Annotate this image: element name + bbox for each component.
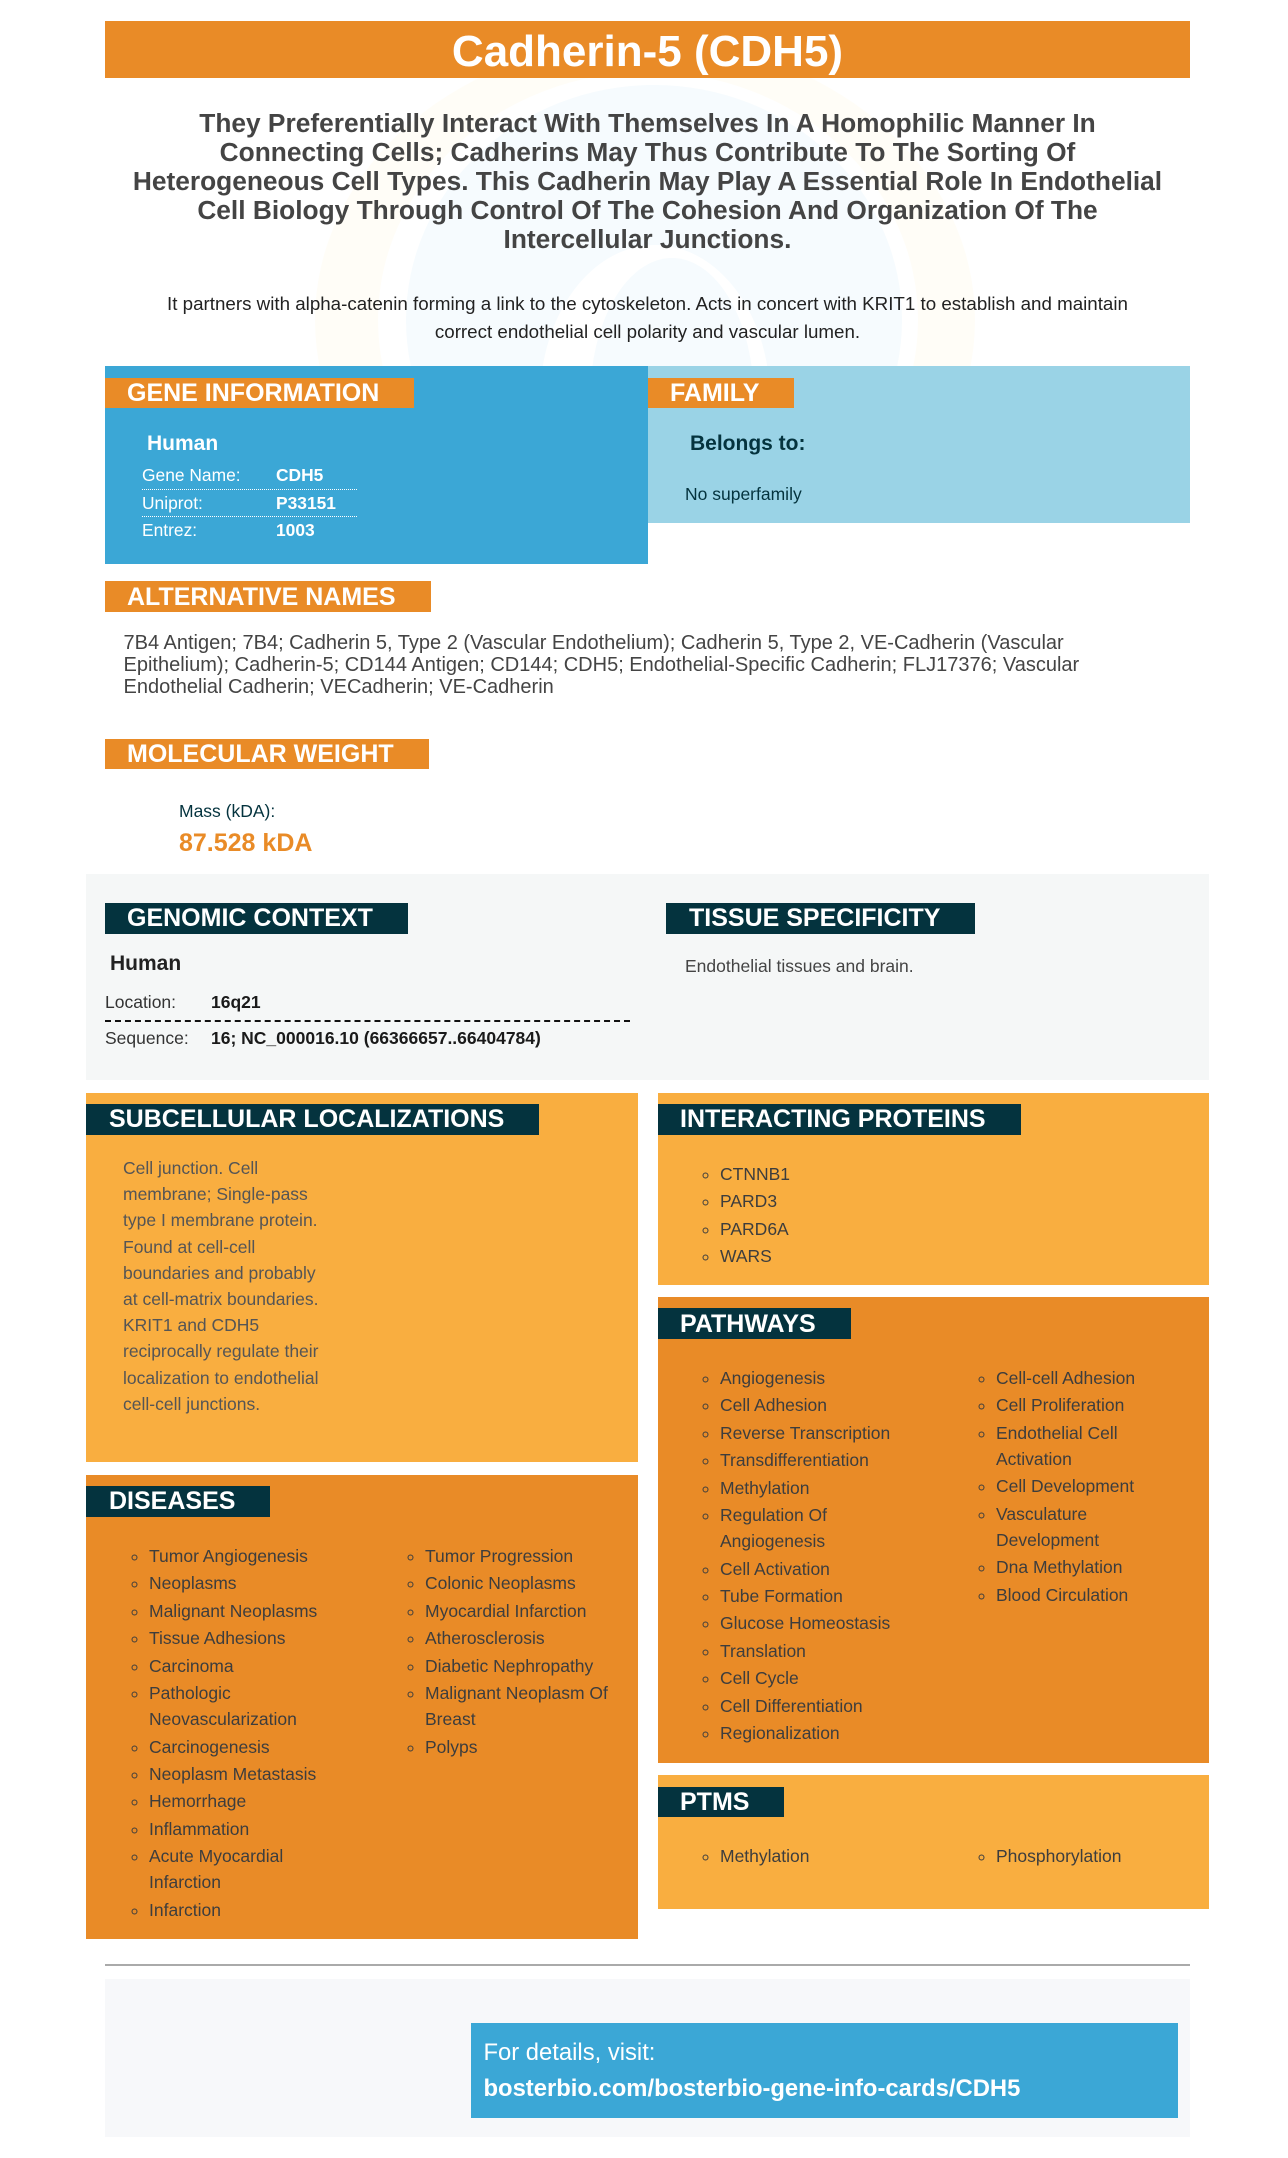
list: pathways column 2: Cell Proliferation	[996, 1395, 1124, 1415]
callout: details link	[471, 2023, 1178, 2118]
heading: family	[648, 378, 794, 408]
panel: genomic context and tissue specificity: 16q21	[211, 992, 261, 1012]
panel: footer	[105, 1979, 1190, 2137]
row: entrez	[142, 520, 315, 540]
list: diseases column 2	[408, 1546, 608, 1757]
list: diseases column 1: Infarction	[149, 1872, 221, 1892]
list: pathways column 2: Vasculature	[996, 1504, 1087, 1524]
alternative names text: 7B4 Antigen; 7B4; Cadherin 5, Type 2 (Vascular Endothelium); Cadherin 5, Type 2, VE-Cadherin (Vascular	[124, 632, 1064, 654]
heading summary: Connecting Cells; Cadherins May Thus Contribute To The Sorting Of	[220, 137, 1075, 167]
title	[105, 21, 1190, 78]
list: pathways column 1: Reverse Transcription	[720, 1423, 890, 1443]
list: diseases column 2: Malignant Neoplasm Of	[425, 1683, 608, 1703]
list: diseases column 2: Diabetic Nephropathy	[425, 1656, 593, 1676]
localization text: reciprocally regulate their	[123, 1341, 319, 1361]
row: gene name: CDH5	[276, 465, 323, 485]
alternative names text	[124, 632, 1079, 698]
list: pathways column 2: Blood Circulation	[996, 1585, 1128, 1605]
list: proteins	[702, 1164, 790, 1266]
heading summary	[133, 108, 1162, 254]
list: proteins: PARD3	[720, 1191, 777, 1211]
list: pathways column 2: Dna Methylation	[996, 1557, 1122, 1577]
alternative names text: Endothelial Cadherin; VECadherin; VE-Cadherin	[124, 676, 554, 698]
list: diseases column 1: Acute Myocardial	[149, 1846, 283, 1866]
list: diseases column 2: Atherosclerosis	[425, 1628, 545, 1648]
mass label: Mass (kDA):	[179, 801, 275, 821]
row: entrez: 1003	[276, 520, 315, 540]
heading: molecular weight: MOLECULAR WEIGHT	[127, 740, 394, 768]
localization text: cell-cell junctions.	[123, 1394, 260, 1414]
list: pathways column 1: Tube Formation	[720, 1586, 843, 1606]
list: pathways column 1: Regionalization	[720, 1723, 840, 1743]
panel: diseases	[86, 1475, 638, 1939]
list: pathways column 1: Cell Cycle	[720, 1668, 799, 1688]
callout: details link: For details, visit:	[484, 2039, 655, 2066]
description text: correct endothelial cell polarity and vascular lumen.	[435, 320, 860, 342]
list: proteins: WARS	[720, 1246, 772, 1266]
organism label: Human	[110, 952, 181, 975]
row: uniprot	[142, 490, 357, 517]
row: sequence: Sequence:	[105, 1028, 189, 1048]
list: diseases column 2: Tumor Progression	[425, 1546, 573, 1566]
list: diseases column 1: Hemorrhage	[149, 1791, 246, 1811]
heading: pathways: PATHWAYS	[680, 1310, 816, 1338]
list: diseases column 2: Polyps	[425, 1737, 478, 1757]
list: pathways column 1: Angiogenesis	[720, 1368, 825, 1388]
tissue text: Endothelial tissues and brain.	[685, 956, 914, 976]
list: ptms column 2: Phosphorylation	[996, 1846, 1122, 1866]
localization text: localization to endothelial	[123, 1368, 319, 1388]
heading: gene information: GENE INFORMATION	[127, 379, 379, 407]
alternative names text: Epithelium); Cadherin-5; CD144 Antigen; CD144; CDH5; Endothelial-Specific Cadherin; FLJ17376; Vascular	[124, 654, 1079, 676]
heading: pathways	[658, 1308, 851, 1339]
heading: subcellular localizations: SUBCELLULAR LOCALIZATIONS	[109, 1105, 504, 1133]
row: uniprot: Uniprot:	[142, 493, 203, 513]
list: pathways column 1: Angiogenesis	[720, 1531, 825, 1551]
panel: interacting proteins	[658, 1093, 1209, 1285]
heading: diseases: DISEASES	[109, 1487, 235, 1515]
heading: ptms: PTMS	[680, 1788, 749, 1816]
heading: alternative names: ALTERNATIVE NAMES	[127, 583, 396, 611]
list: diseases column 1: Carcinogenesis	[149, 1737, 270, 1757]
callout: details link: bosterbio.com/bosterbio-gene-info-cards/CDH5	[484, 2075, 1020, 2102]
heading summary: Heterogeneous Cell Types. This Cadherin May Play A Essential Role In Endothelial	[133, 166, 1162, 196]
heading: genomic context: GENOMIC CONTEXT	[127, 904, 373, 932]
organism label: Human	[147, 432, 218, 455]
heading summary: Cell Biology Through Control Of The Cohesion And Organization Of The	[197, 195, 1098, 225]
heading: family: FAMILY	[670, 379, 759, 407]
mass value: 87.528 kDA	[179, 829, 312, 857]
list: pathways column 2: Cell Development	[996, 1476, 1134, 1496]
row: gene name	[142, 462, 357, 490]
list: diseases column 2: Colonic Neoplasms	[425, 1573, 576, 1593]
list: pathways column 1: Cell Differentiation	[720, 1696, 863, 1716]
list: diseases column 1: Infarction	[149, 1900, 221, 1920]
heading: ptms	[658, 1787, 784, 1817]
panel: subcellular localizations	[86, 1093, 638, 1462]
heading summary: They Preferentially Interact With Themselves In A Homophilic Manner In	[199, 108, 1096, 138]
list: pathways column 1: Regulation Of	[720, 1505, 827, 1525]
list: diseases column 1: Tumor Angiogenesis	[149, 1546, 308, 1566]
row: location: Location:	[105, 992, 176, 1012]
list: pathways column 2: Activation	[996, 1449, 1072, 1469]
list: diseases column 1: Tissue Adhesions	[149, 1628, 286, 1648]
panel: ptms	[658, 1775, 1209, 1909]
list: pathways column 1: Transdifferentiation	[720, 1450, 869, 1470]
row: location	[105, 992, 261, 1012]
list: diseases column 1: Pathologic	[149, 1683, 231, 1703]
family label: Belongs to:	[690, 432, 806, 455]
localization text: at cell-matrix boundaries.	[123, 1289, 318, 1309]
localization text: Found at cell-cell	[123, 1237, 255, 1257]
family value: No superfamily	[685, 484, 802, 504]
list: pathways column 1: Translation	[720, 1641, 806, 1661]
list: pathways column 1	[702, 1368, 890, 1743]
list: diseases column 1: Malignant Neoplasms	[149, 1601, 317, 1621]
row: uniprot: P33151	[276, 493, 336, 513]
panel: family	[648, 366, 1190, 523]
list: diseases column 1: Neovascularization	[149, 1709, 297, 1729]
list: pathways column 1: Methylation	[720, 1478, 810, 1498]
localization text	[123, 1158, 319, 1414]
localization text: Cell junction. Cell	[123, 1158, 258, 1178]
background watermark	[406, 85, 902, 366]
dashed rule	[105, 1020, 630, 1022]
list: pathways column 1: Cell Activation	[720, 1559, 830, 1579]
heading: interacting proteins: INTERACTING PROTEINS	[680, 1105, 986, 1133]
panel: genomic context and tissue specificity: 16; NC_000016.10 (66366657..66404784)	[211, 1028, 541, 1048]
heading summary: Intercellular Junctions.	[504, 224, 791, 254]
list: pathways column 1: Cell Adhesion	[720, 1395, 827, 1415]
row: entrez: Entrez:	[142, 520, 197, 540]
list: pathways column 2	[978, 1368, 1135, 1605]
list: pathways column 1: Glucose Homeostasis	[720, 1613, 890, 1633]
list: pathways column 2: Development	[996, 1530, 1099, 1550]
row: sequence	[105, 1028, 541, 1048]
list: diseases column 1	[132, 1546, 317, 1920]
panel: pathways	[658, 1297, 1209, 1763]
panel: gene information	[105, 366, 648, 564]
list: diseases column 1: Carcinoma	[149, 1656, 234, 1676]
localization text: KRIT1 and CDH5	[123, 1315, 259, 1335]
list: ptms column 1: Methylation	[720, 1846, 810, 1866]
heading: diseases	[86, 1486, 270, 1517]
localization text: type I membrane protein.	[123, 1210, 318, 1230]
list: diseases column 2: Myocardial Infarction	[425, 1601, 586, 1621]
localization text: boundaries and probably	[123, 1263, 316, 1283]
description text: It partners with alpha-catenin forming a link to the cytoskeleton. Acts in concert with KRIT1 to establish and maintain	[167, 292, 1128, 314]
list: diseases column 1: Neoplasms	[149, 1573, 237, 1593]
list: proteins: PARD6A	[720, 1219, 789, 1239]
list: diseases column 1: Inflammation	[149, 1819, 249, 1839]
localization text: membrane; Single-pass	[123, 1184, 308, 1204]
description text	[167, 292, 1128, 342]
heading: tissue specificity: TISSUE SPECIFICITY	[689, 904, 940, 932]
list: pathways column 2: Endothelial Cell	[996, 1423, 1118, 1443]
panel: genomic context and tissue specificity	[86, 874, 1209, 1080]
list: diseases column 1: Neoplasm Metastasis	[149, 1764, 316, 1784]
list: diseases column 2: Breast	[425, 1709, 476, 1729]
title: Cadherin-5 (CDH5)	[452, 27, 843, 76]
list: proteins: CTNNB1	[720, 1164, 790, 1184]
row: gene name: Gene Name:	[142, 465, 241, 485]
list: pathways column 2: Cell-cell Adhesion	[996, 1368, 1135, 1388]
gene table	[142, 465, 357, 540]
